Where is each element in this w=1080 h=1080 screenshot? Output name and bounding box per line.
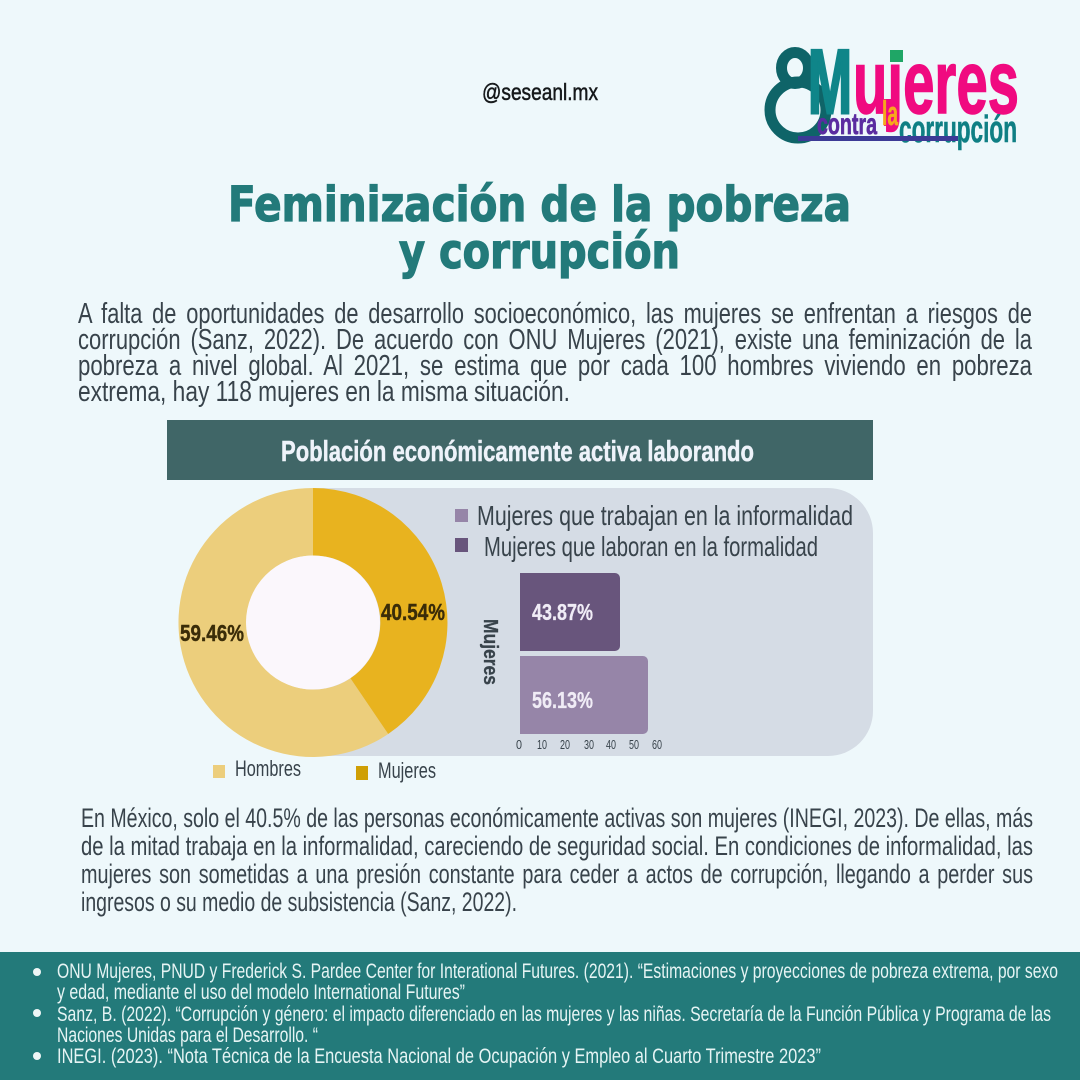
references footer: Naciones Unidas para el Desarrollo. “: [57, 1024, 318, 1047]
logo: 8 Mujeres contra la corrupción: [770, 32, 1019, 151]
bar chart legend: Mujeres que laboran en la formalidad: [484, 531, 818, 562]
bar chart: informal vs formal: 20: [560, 737, 570, 752]
chart header band: [167, 420, 873, 480]
donut legend: Mujeres: [378, 758, 436, 783]
bar chart: informal vs formal: 50: [629, 737, 639, 752]
bar chart legend: [455, 500, 853, 562]
bar chart: informal vs formal: 40: [606, 737, 616, 752]
references footer: INEGI. (2023). “Nota Técnica de la Encuesta Nacional de Ocupación y Empleo al Cuarto Trimestre 2023”: [57, 1045, 821, 1068]
logo: 8 Mujeres contra la corrupción: contra: [817, 108, 877, 141]
title: Feminización de la pobreza: [228, 177, 851, 233]
second paragraph: ingresos o su medio de subsistencia (Sanz, 2022).: [81, 887, 517, 917]
social handle: @seseanl.mx: [482, 79, 598, 105]
bar chart: informal vs formal: 10: [537, 737, 547, 752]
bar chart legend: Mujeres que trabajan en la informalidad: [477, 500, 853, 531]
bar chart: informal vs formal: 0: [516, 737, 522, 752]
chart panel background: [313, 488, 873, 756]
bar chart: informal vs formal: 43.87%: [532, 599, 593, 625]
logo: 8 Mujeres contra la corrupción: M: [808, 32, 852, 133]
references footer: [0, 952, 1080, 1080]
title: [228, 177, 851, 280]
bar chart: informal vs formal: [479, 573, 662, 752]
donut legend: Hombres: [235, 756, 301, 781]
title: y corrupción: [399, 224, 680, 280]
intro paragraph: [78, 298, 1033, 408]
bar chart: informal vs formal: 30: [584, 737, 594, 752]
bar chart: informal vs formal: Mujeres: [479, 619, 501, 685]
donut chart: Hombres vs Mujeres: 40.54%: [381, 599, 445, 625]
bar chart: informal vs formal: 60: [652, 737, 662, 752]
logo: 8 Mujeres contra la corrupción: la: [882, 95, 899, 133]
bar chart: informal vs formal: 56.13%: [532, 687, 593, 713]
second paragraph: [81, 803, 1033, 917]
donut legend: [213, 756, 436, 783]
intro paragraph: extrema, hay 118 mujeres en la misma situación.: [78, 376, 570, 408]
references footer: y edad, mediante el uso del modelo International Futures”: [57, 981, 465, 1004]
donut chart: Hombres vs Mujeres: 59.46%: [180, 620, 244, 646]
donut chart: Hombres vs Mujeres: [178, 488, 447, 757]
chart header band: Población económicamente activa laborando: [281, 436, 754, 468]
